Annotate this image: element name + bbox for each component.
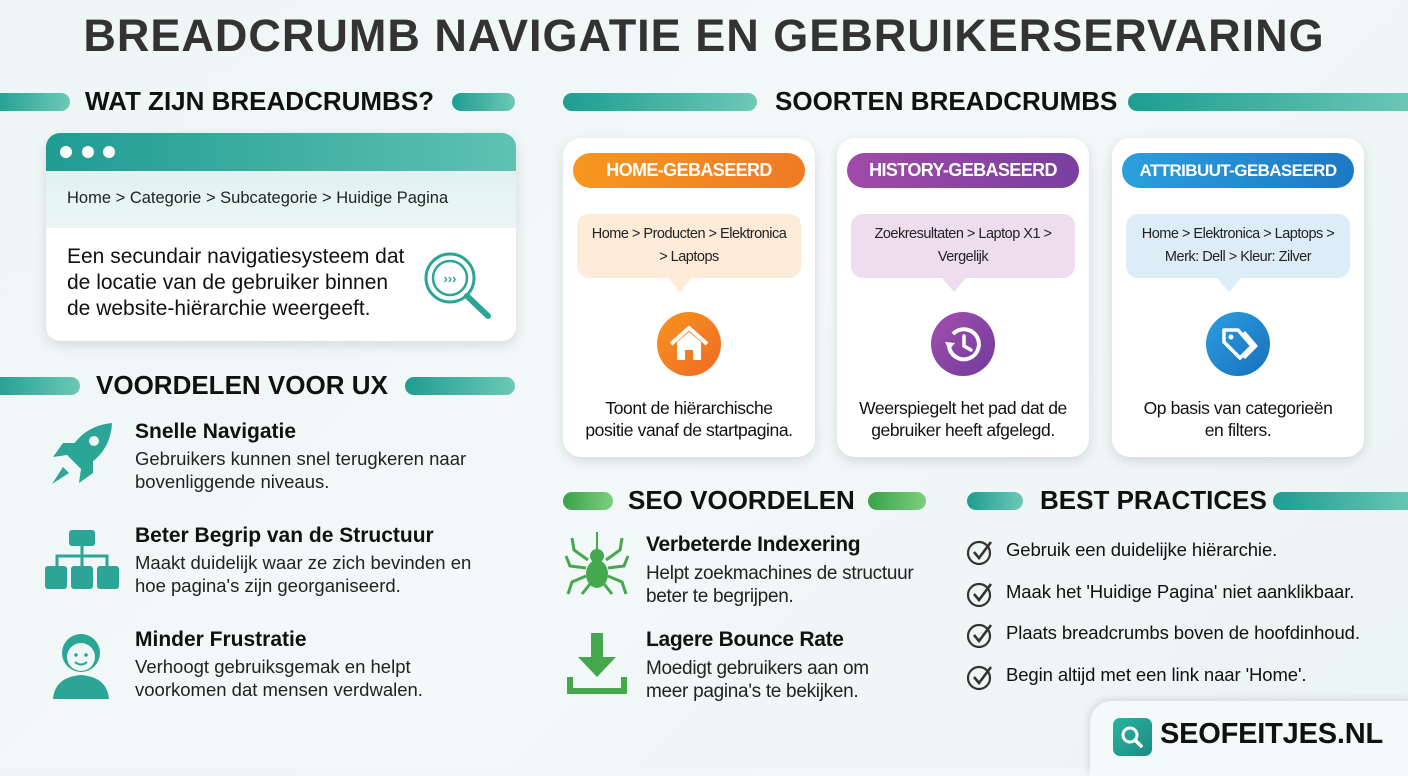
card: home-gebaseerd: > Laptops bbox=[659, 249, 719, 265]
icon: magnifier: ››› bbox=[444, 271, 456, 286]
icon: spider bbox=[564, 532, 630, 595]
card: home-gebaseerd: Toont de hiërarchische bbox=[605, 398, 773, 418]
seo: verbeterde indexering: Verbeterde Indexering bbox=[646, 533, 860, 556]
card: history-gebaseerd bbox=[837, 138, 1089, 457]
icon: sitemap bbox=[45, 530, 119, 589]
seo: lagere bounce rate: Lagere Bounce Rate bbox=[646, 628, 844, 651]
card: history-gebaseerd: gebruiker heeft afgelegd. bbox=[871, 420, 1055, 440]
icon: logo search bbox=[1113, 718, 1152, 756]
seo: verbeterde indexering: beter te begrijpen. bbox=[646, 586, 793, 607]
definition text: Een secundair navigatiesysteem dat bbox=[67, 245, 404, 268]
benefit: minder frustratie: Verhoogt gebruiksgemak en helpt bbox=[135, 656, 411, 677]
logo: seofeitjes.nl: SEOFEITJES.NL bbox=[1160, 718, 1383, 750]
benefit: beter begrip: hoe pagina's zijn georganiseerd. bbox=[135, 575, 401, 596]
definition text: de website-hiërarchie weergeeft. bbox=[67, 297, 370, 320]
definition text: de locatie van de gebruiker binnen bbox=[67, 271, 388, 294]
benefit: minder frustratie bbox=[53, 628, 423, 700]
icon: history bbox=[931, 312, 995, 376]
icon: tags bbox=[1206, 312, 1270, 376]
best practice 4: Begin altijd met een link naar 'Home'. bbox=[1006, 664, 1306, 685]
card: history-gebaseerd: Zoekresultaten > Laptop X1 > bbox=[874, 226, 1052, 242]
icon: download bbox=[567, 633, 627, 694]
seo: verbeterde indexering bbox=[564, 532, 914, 607]
best practice 3: Plaats breadcrumbs boven de hoofdinhoud. bbox=[1006, 622, 1360, 643]
card: attribuut-gebaseerd: Merk: Dell > Kleur: Zilver bbox=[1165, 249, 1311, 265]
seo: lagere bounce rate: Moedigt gebruikers aan om bbox=[646, 658, 869, 679]
card: home-gebaseerd bbox=[563, 138, 815, 457]
seo: lagere bounce rate: meer pagina's te bekijken. bbox=[646, 681, 858, 702]
logo: seofeitjes.nl bbox=[1090, 701, 1408, 776]
benefit: minder frustratie: Minder Frustratie bbox=[135, 628, 307, 651]
breadcrumb strip: Home > Categorie > Subcategorie > Huidige Pagina bbox=[67, 189, 448, 207]
best practice 1 bbox=[966, 539, 1277, 566]
benefit: beter begrip: Maakt duidelijk waar ze zich bevinden en bbox=[135, 552, 471, 573]
seo: verbeterde indexering: Helpt zoekmachines de structuur bbox=[646, 563, 913, 584]
definition text bbox=[67, 245, 404, 320]
icon: home bbox=[657, 312, 721, 376]
panel: browser definition bbox=[46, 133, 516, 341]
heading: seo voordelen: SEO VOORDELEN bbox=[628, 485, 855, 515]
benefit: snelle navigatie: Gebruikers kunnen snel terugkeren naar bbox=[135, 448, 466, 469]
card: home-gebaseerd: HOME-GEBASEERD bbox=[606, 160, 772, 180]
card: history-gebaseerd: HISTORY-GEBASEERD bbox=[869, 160, 1057, 180]
heading: best practices: BEST PRACTICES bbox=[1040, 485, 1267, 515]
benefit: snelle navigatie bbox=[52, 420, 466, 492]
benefit: beter begrip bbox=[45, 524, 471, 596]
card: attribuut-gebaseerd: en filters. bbox=[1205, 420, 1271, 440]
card: attribuut-gebaseerd bbox=[1112, 138, 1364, 457]
seo: lagere bounce rate bbox=[567, 628, 869, 702]
card: attribuut-gebaseerd: ATTRIBUUT-GEBASEERD bbox=[1139, 161, 1336, 180]
benefit: snelle navigatie: bovenliggende niveaus. bbox=[135, 471, 329, 492]
benefit: minder frustratie: voorkomen dat mensen verdwalen. bbox=[135, 679, 423, 700]
best practice 1: Gebruik een duidelijke hiërarchie. bbox=[1006, 539, 1277, 560]
card: history-gebaseerd: Weerspiegelt het pad dat de bbox=[859, 398, 1067, 418]
card: history-gebaseerd: Vergelijk bbox=[938, 249, 988, 265]
title: BREADCRUMB NAVIGATIE EN GEBRUIKERSERVARING bbox=[83, 10, 1325, 61]
card: attribuut-gebaseerd: Home > Elektronica > Laptops > bbox=[1142, 226, 1334, 242]
card: home-gebaseerd: Home > Producten > Elektronica bbox=[592, 226, 786, 242]
icon: rocket bbox=[52, 423, 112, 484]
icon: magnifier bbox=[424, 252, 491, 319]
card: home-gebaseerd: positie vanaf de startpagina. bbox=[585, 420, 793, 440]
breadcrumb strip bbox=[46, 171, 516, 228]
heading: wat zijn breadcrumbs: WAT ZIJN BREADCRUMBS? bbox=[85, 86, 434, 116]
heading: voordelen voor ux: VOORDELEN VOOR UX bbox=[96, 370, 388, 400]
benefit: beter begrip: Beter Begrip van de Structuur bbox=[135, 524, 434, 547]
card: attribuut-gebaseerd: Op basis van categorieën bbox=[1144, 398, 1332, 418]
heading: soorten breadcrumbs: SOORTEN BREADCRUMBS bbox=[775, 86, 1117, 116]
icon: user bbox=[53, 634, 109, 699]
best practice 2: Maak het 'Huidige Pagina' niet aanklikbaar. bbox=[1006, 581, 1354, 602]
benefit: snelle navigatie: Snelle Navigatie bbox=[135, 420, 296, 443]
